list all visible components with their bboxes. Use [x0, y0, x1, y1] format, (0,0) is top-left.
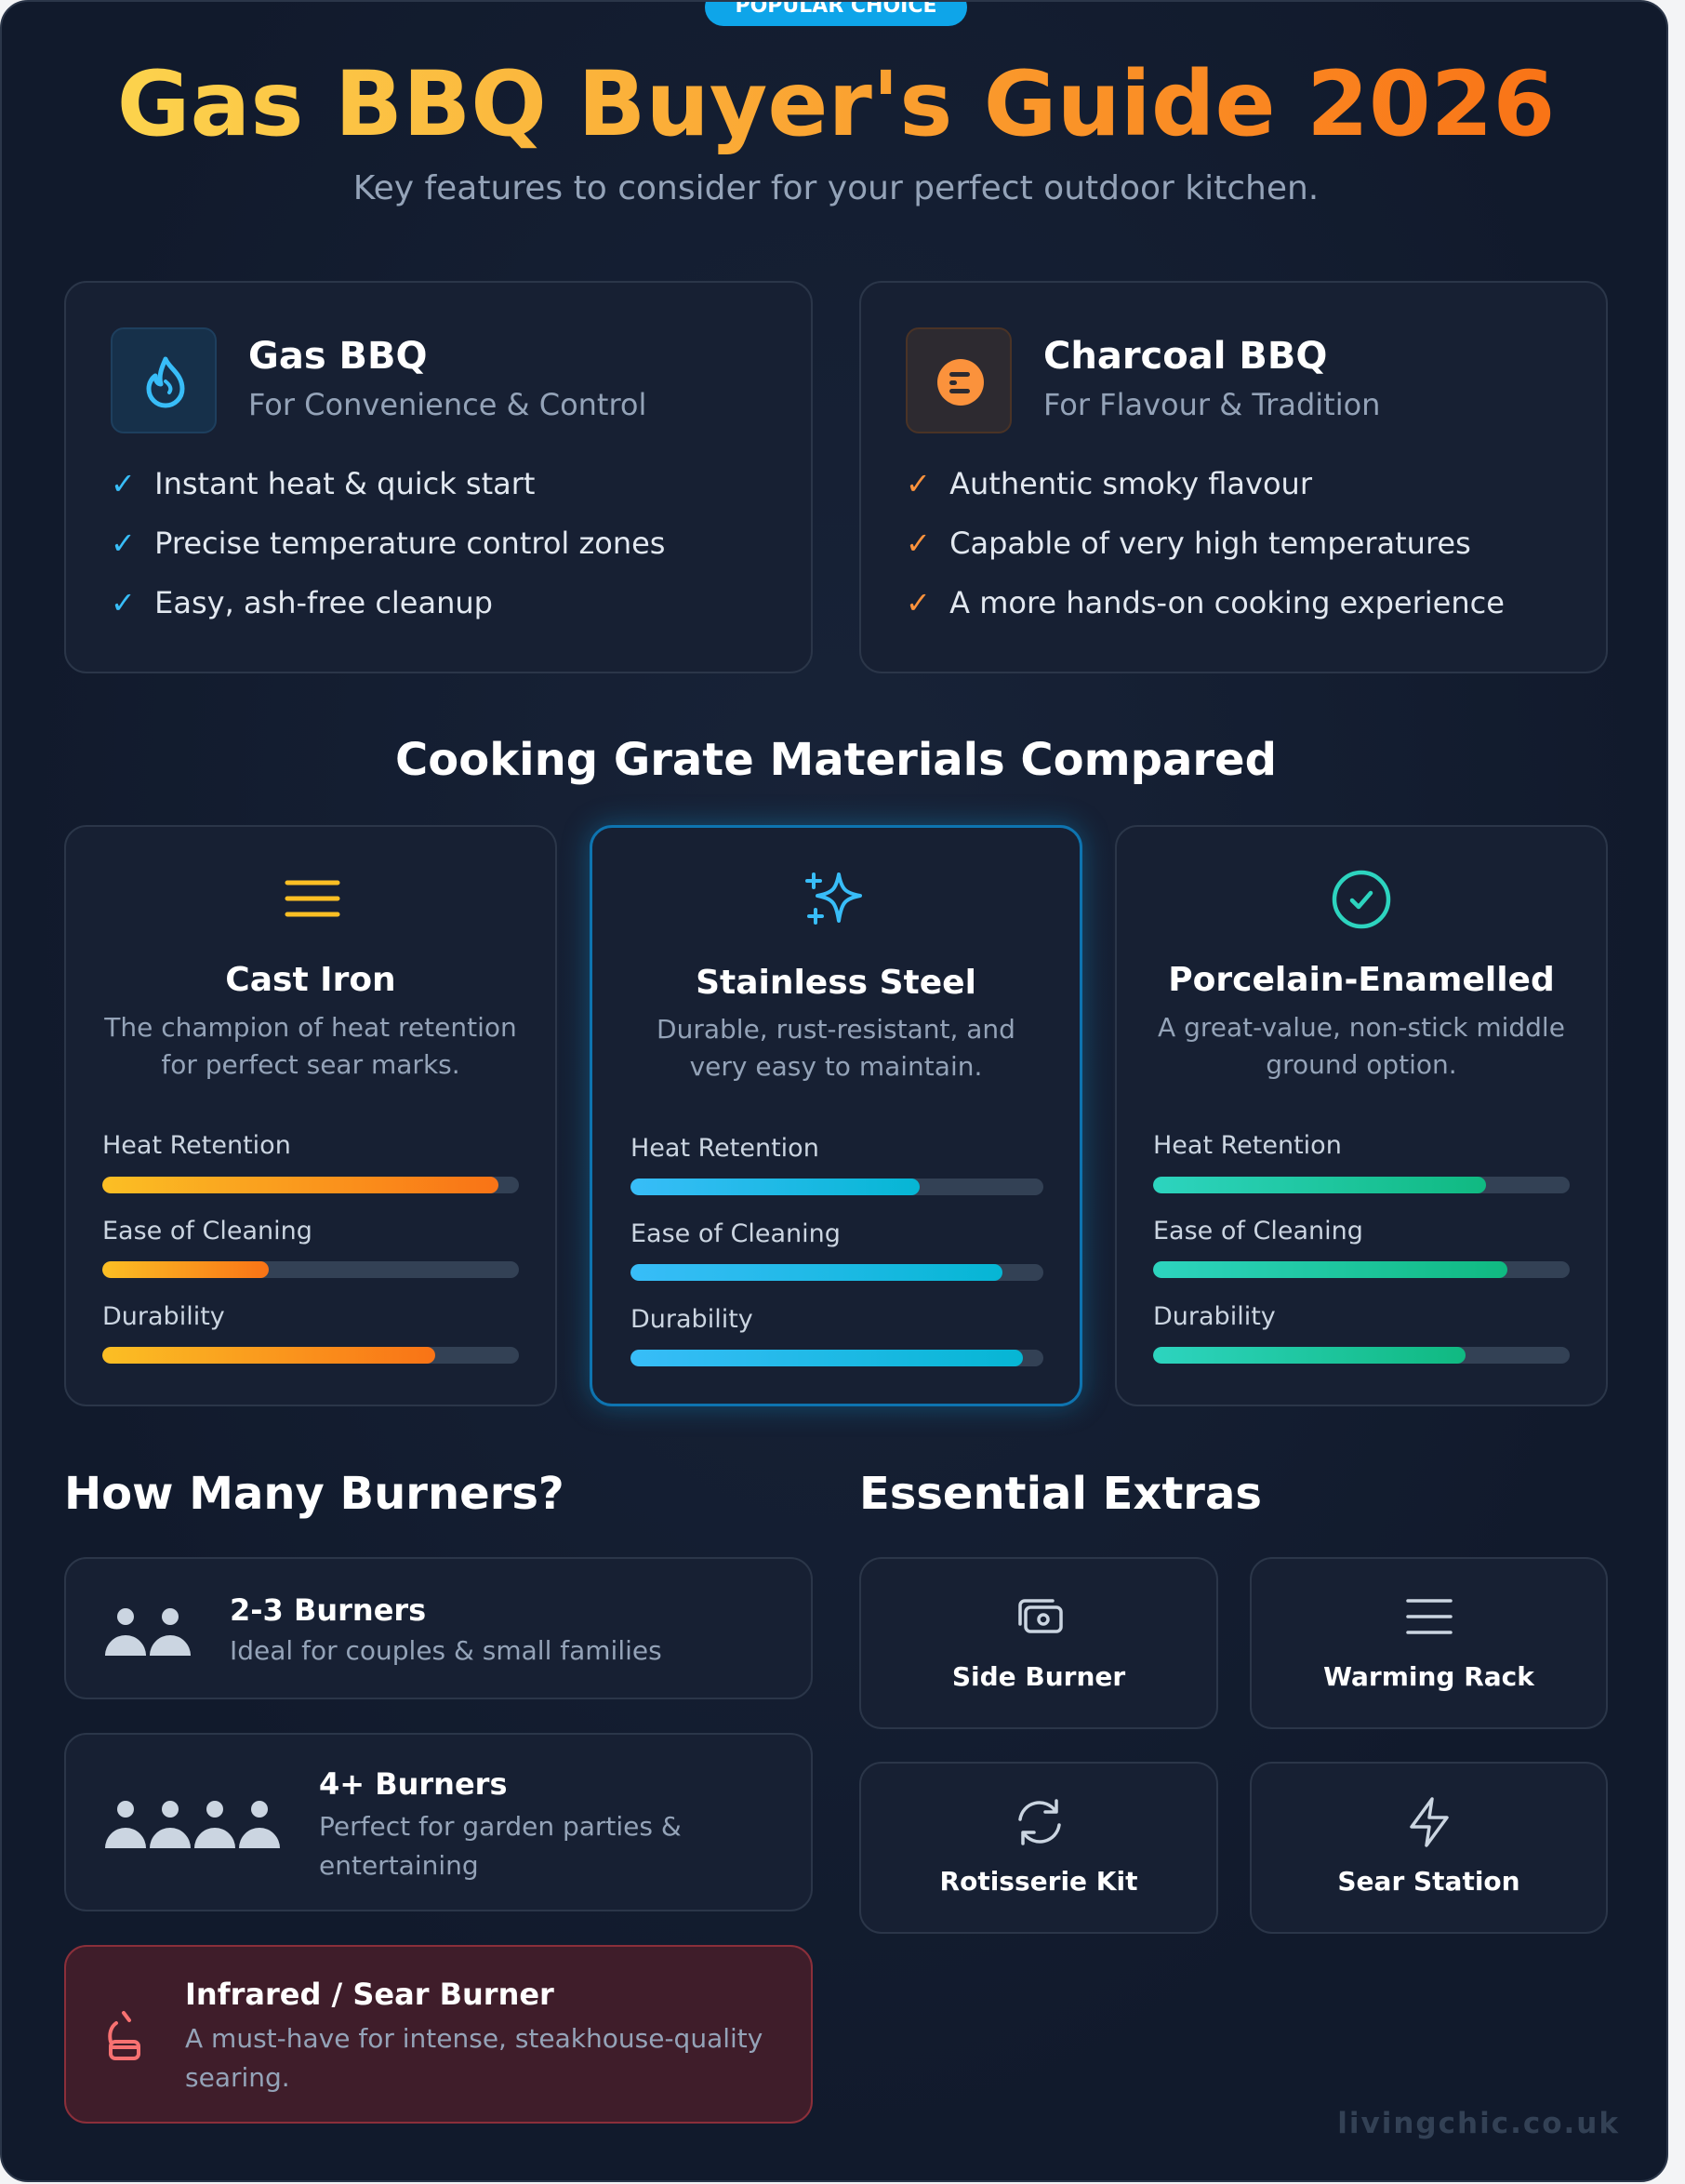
icon: charcoal [906, 327, 1012, 433]
burner card: 4+: entertaining [319, 1850, 479, 1881]
panel: gas bbq [64, 281, 813, 673]
icon: rotate [1018, 1799, 1061, 1845]
watermark: livingchic.co.uk [1337, 2107, 1620, 2140]
panel: cast iron [64, 825, 557, 1406]
extra: rotisserie [859, 1762, 1218, 1934]
panel: charcoal bbq: For Flavour & Tradition [1043, 387, 1380, 422]
bullets: ✓ Authentic smoky flavour [906, 466, 1312, 501]
panel: stainless steel: Durability [630, 1305, 753, 1334]
panel: cast iron: for perfect sear marks. [161, 1049, 460, 1080]
panel: charcoal bbq [859, 281, 1608, 673]
extra: side burner [859, 1557, 1218, 1729]
panel: porcelain: Heat Retention [1153, 1131, 1342, 1160]
panel: stainless steel: very easy to maintain. [690, 1051, 982, 1082]
icon: sear [108, 2011, 140, 2060]
burner card: 2-3: Ideal for couples & small families [230, 1635, 662, 1666]
subtitle: Key features to consider for your perfect outdoor kitchen. [353, 169, 1319, 207]
extra: sear station [1250, 1762, 1608, 1934]
burner card: infrared [64, 1945, 813, 2124]
extra: side burner: Side Burner [952, 1661, 1125, 1692]
panel: porcelain: ground option. [1266, 1049, 1457, 1080]
panel: gas bbq: For Convenience & Control [248, 387, 646, 422]
panel: cast iron: Durability [102, 1302, 225, 1331]
panel: stainless steel: Stainless Steel [696, 964, 976, 1002]
extra: warming rack: Warming Rack [1323, 1661, 1534, 1692]
panel: stainless steel: Ease of Cleaning [630, 1219, 841, 1248]
icon: sparkles [805, 872, 862, 925]
bullets [906, 466, 1505, 620]
heading: extras: Essential Extras [859, 1468, 1262, 1520]
panel: cast iron: Ease of Cleaning [102, 1217, 312, 1245]
heading: Gas BBQ [248, 335, 428, 378]
icon: lines [285, 880, 340, 917]
icon: side burner [1018, 1599, 1063, 1633]
bullets [111, 466, 665, 620]
title: Gas BBQ Buyer's Guide 2026 [117, 52, 1555, 156]
panel: porcelain [1115, 825, 1608, 1406]
icon: four people [105, 1801, 280, 1848]
panel: cast iron: The champion of heat retention [104, 1012, 517, 1043]
panel: porcelain: Durability [1153, 1302, 1276, 1331]
icon: bolt [1410, 1797, 1449, 1847]
section heading: grates: Cooking Grate Materials Compared [395, 734, 1277, 786]
icon: two people [105, 1608, 191, 1656]
burner card: 2-3 [64, 1557, 813, 1699]
extra: warming rack [1250, 1557, 1608, 1729]
panel: stainless steel: Heat Retention [630, 1134, 819, 1163]
bullets: ✓ A more hands-on cooking experience [906, 585, 1505, 620]
burner card: infrared: A must-have for intense, steakhouse-quality [185, 2023, 763, 2054]
panel: porcelain: Porcelain-Enamelled [1168, 961, 1555, 999]
burner card: infrared: Infrared / Sear Burner [185, 1977, 554, 2012]
bullets: ✓ Precise temperature control zones [111, 526, 665, 561]
burner card: infrared: searing. [185, 2062, 290, 2093]
icon: rack lines [1406, 1599, 1453, 1634]
panel: porcelain: A great-value, non-stick middle [1158, 1012, 1565, 1043]
heading: burners: How Many Burners? [64, 1468, 564, 1520]
extra: sear station: Sear Station [1337, 1866, 1520, 1897]
burner card: 4+: Perfect for garden parties & [319, 1811, 682, 1842]
extra: rotisserie: Rotisserie Kit [940, 1866, 1137, 1897]
icon: flame [111, 327, 217, 433]
burner card: 4+: 4+ Burners [319, 1766, 507, 1802]
bullets: ✓ Easy, ash-free cleanup [111, 585, 493, 620]
panel: cast iron: Heat Retention [102, 1131, 291, 1160]
badge [705, 0, 967, 26]
burner card: 4+ [64, 1733, 813, 1911]
bullets: ✓ Instant heat & quick start [111, 466, 535, 501]
bullets: ✓ Capable of very high temperatures [906, 526, 1471, 561]
burner card: 2-3: 2-3 Burners [230, 1592, 426, 1628]
heading: Charcoal BBQ [1043, 335, 1327, 378]
panel: cast iron: Cast Iron [225, 961, 396, 999]
panel: stainless steel [590, 825, 1082, 1406]
panel: porcelain: Ease of Cleaning [1153, 1217, 1363, 1245]
panel: stainless steel: Durable, rust-resistant, and [657, 1014, 1015, 1045]
icon: check circle [1332, 871, 1391, 928]
